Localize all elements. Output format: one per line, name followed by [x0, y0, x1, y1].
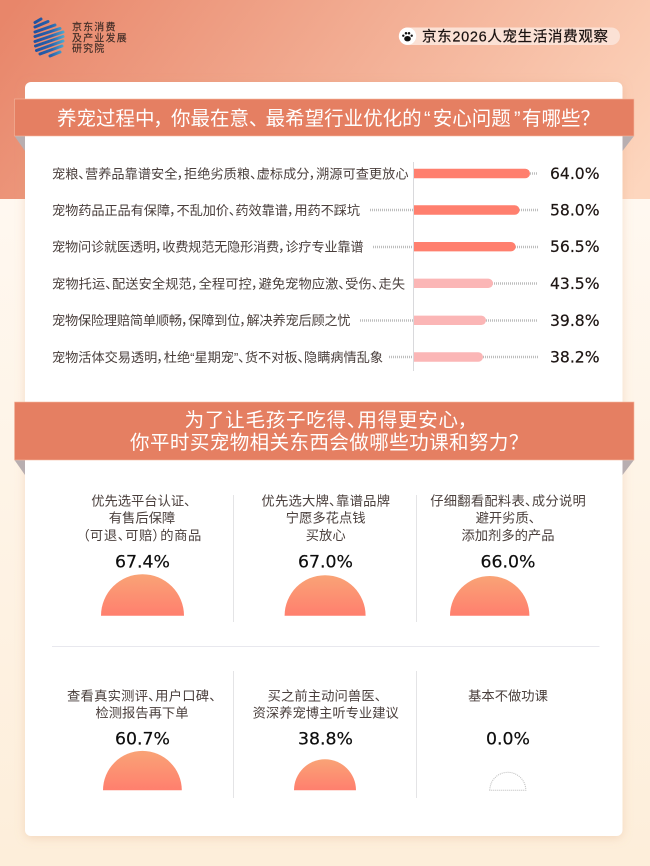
item: platform certified 67.4%: （可退、可赔）的商品 — [83, 528, 201, 543]
item: platform certified 67.4%: 67.4% — [115, 552, 170, 572]
heading text: 你最在意、 — [171, 108, 259, 130]
chart axis — [412, 162, 414, 371]
semicircle — [103, 751, 182, 790]
item: ask vets 38.8%: 资深养宠博主听专业建议 — [253, 706, 399, 720]
row 4: 宠物托运、配送安全规范，全程可控，避免宠物应激、受伤、走失 — [52, 275, 405, 291]
item: ingredient list 66.0%: 66.0% — [481, 552, 535, 572]
item: no homework 0.0%: 0.0% — [486, 729, 530, 749]
heading text: 养宠过程中， — [57, 108, 164, 130]
item: big brands 67.0% — [261, 492, 390, 616]
semicircle outline — [490, 772, 526, 790]
row 4: 43.5% — [550, 275, 600, 293]
row 6: 宠物活体交易透明，杜绝“星期宠”、货不对板、隐瞒病情乱象 — [52, 349, 383, 365]
pill title: 京东2026人宠生活消费观察 — [422, 28, 608, 46]
item: ingredient list 66.0%: 避开劣质、 — [476, 510, 535, 526]
row 2 — [52, 202, 600, 220]
bar chart: 安心问题 — [52, 162, 600, 371]
icon: paw — [402, 32, 413, 41]
row 3: 56.5% — [550, 238, 600, 256]
panel: section 1 heading banner — [14, 99, 634, 151]
item: ask vets 38.8%: 38.8% — [298, 729, 353, 749]
row 5 — [52, 312, 600, 330]
semicircle — [101, 574, 184, 616]
row 2: 58.0% — [550, 202, 600, 220]
item: real reviews 60.7%: 查看真实测评、用户口碑、 — [67, 688, 216, 704]
row 1: 宠粮、营养品靠谱安全，拒绝劣质粮、虚标成分，溯源可查更放心 — [52, 165, 408, 181]
semicircle — [294, 759, 356, 790]
heading text: “ — [424, 108, 430, 130]
panel: section 2 heading banner — [14, 402, 634, 475]
row 5: 39.8% — [550, 312, 600, 330]
item: real reviews 60.7%: 60.7% — [115, 729, 170, 749]
item: platform certified 67.4%: 有售后保障 — [109, 510, 175, 526]
logo: 京东消费及产业发展研究院 — [35, 19, 128, 56]
item: platform certified 67.4% — [83, 494, 201, 616]
item: ingredient list 66.0% — [430, 494, 586, 616]
row 3: 宠物问诊就医透明，收费规范无隐形消费，诊疗专业靠谱 — [52, 240, 364, 255]
heading text: 安心问题 — [433, 108, 511, 130]
icon: striped logo mark — [35, 19, 63, 56]
item: big brands 67.0%: 优先选大牌、靠谱品牌 — [261, 492, 390, 508]
row 2: 宠物药品正品有保障，不乱加价、药效靠谱，用药不踩坑 — [52, 203, 360, 218]
logo text — [72, 20, 128, 55]
row 6: 38.2% — [550, 348, 600, 366]
row 5: 宠物保险理赔简单顺畅，保障到位，解决养宠后顾之忧 — [52, 312, 351, 328]
item: ingredient list 66.0%: 添加剂多的产品 — [461, 527, 555, 543]
heading text: 最希望行业优化的 — [266, 108, 422, 130]
item: real reviews 60.7% — [67, 688, 216, 790]
item: platform certified 67.4%: 优先选平台认证、 — [91, 494, 191, 508]
report tag pill — [399, 28, 620, 46]
item: big brands 67.0%: 宁愿多花点钱 — [286, 510, 366, 526]
row 1 — [52, 165, 600, 183]
row 6 — [52, 348, 600, 366]
item: big brands 67.0%: 67.0% — [298, 552, 353, 572]
row 3 — [52, 238, 600, 256]
item: no homework 0.0%: 基本不做功课 — [468, 688, 548, 704]
heading text — [130, 409, 519, 454]
heading text: 有哪些？ — [522, 108, 590, 130]
item: ask vets 38.8%: 买之前主动问兽医、 — [268, 688, 381, 704]
item: ingredient list 66.0%: 仔细翻看配料表、成分说明 — [430, 494, 586, 508]
row 1: 64.0% — [550, 165, 600, 183]
semicircle — [450, 576, 529, 616]
logo text: 京东消费 — [72, 20, 117, 34]
logo text: 及产业发展 — [72, 32, 128, 44]
row 4 — [52, 275, 600, 293]
logo text: 研究院 — [72, 42, 105, 55]
semicircle — [285, 575, 366, 616]
heading text: 你平时买宠物相关东西会做哪些功课和努力？ — [130, 432, 519, 454]
item: no homework 0.0% — [468, 688, 548, 790]
item: real reviews 60.7%: 检测报告再下单 — [95, 706, 189, 720]
heading text: ” — [514, 108, 520, 130]
item: big brands 67.0%: 买放心 — [306, 528, 346, 543]
item: ask vets 38.8% — [253, 688, 399, 790]
heading text: 为了让毛孩子吃得、用得更安心， — [185, 409, 469, 431]
